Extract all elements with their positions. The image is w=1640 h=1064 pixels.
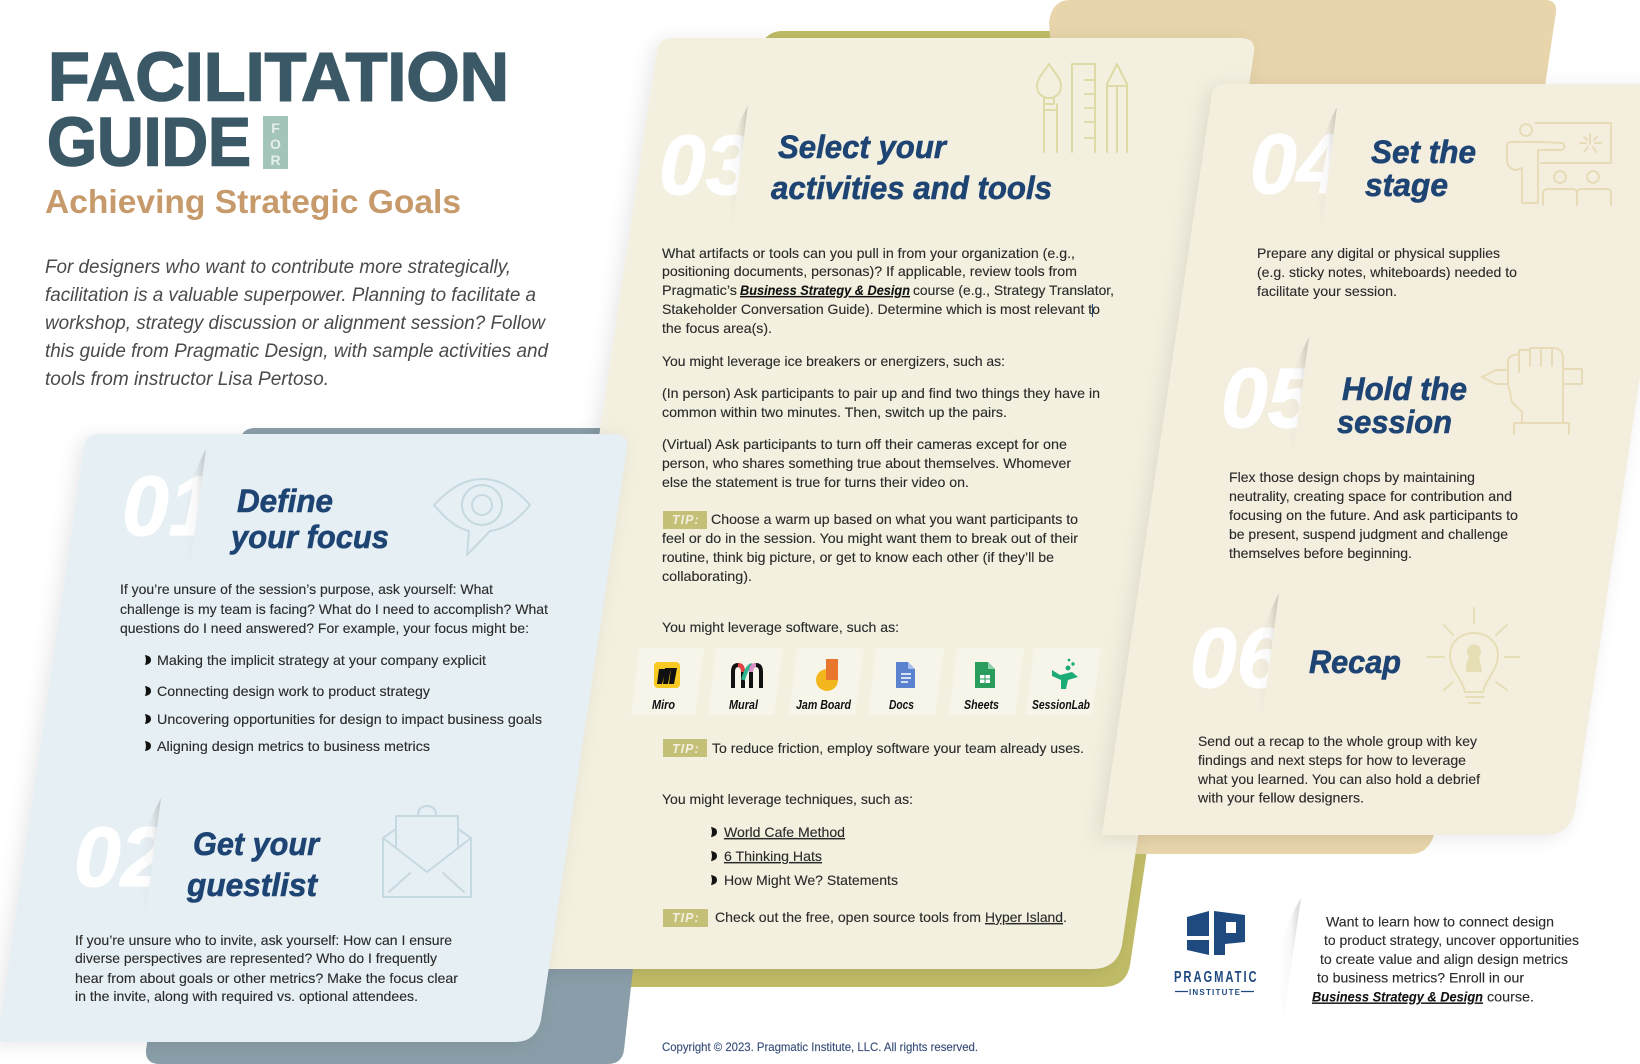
body text 03: common within two minutes. Then, switch up the pairs. [662, 404, 1007, 420]
tool: Docs [868, 648, 944, 715]
tip 1: Choose a warm up based on what you want participants to [711, 511, 1078, 527]
techniques list: World Cafe Method [724, 824, 845, 840]
body text 01: If you’re unsure of the session’s purpose, ask yourself: What [120, 581, 493, 597]
heading 03 [771, 129, 1052, 206]
tool: Sheets: Sheets [964, 697, 999, 712]
logo: Pragmatic Institute: INSTITUTE [1189, 988, 1241, 997]
panel: steps 01 and 02 blue [0, 434, 627, 1042]
intro text: tools from instructor Lisa Pertoso. [45, 369, 329, 390]
body text 05: themselves before beginning. [1229, 545, 1412, 561]
body text 04: Prepare any digital or physical supplies [1257, 245, 1500, 261]
divider fold [1278, 898, 1301, 1015]
call to action: to product strategy, uncover opportunities [1324, 932, 1579, 948]
logo: Pragmatic Institute [1174, 911, 1257, 997]
body text 03: the focus area(s). [662, 320, 772, 336]
body text 02: If you’re unsure who to invite, ask yourself: How can I ensure [75, 932, 452, 948]
body text 02: diverse perspectives are represented? Who do I frequently [75, 950, 437, 966]
tool: Mural [708, 648, 783, 715]
body text 03: What artifacts or tools can you pull in from your organization (e.g., [662, 245, 1075, 261]
tip 3: . [1063, 909, 1067, 925]
tool: Sheets [949, 648, 1024, 715]
techniques list: You might leverage techniques, such as: [662, 791, 913, 807]
icon: eye speech bubble [434, 479, 530, 555]
techniques list: How Might We? Statements [724, 872, 898, 888]
number 02: 02 [74, 810, 167, 904]
body text 05: be present, suspend judgment and challenge [1229, 526, 1508, 542]
body text 03 [662, 245, 1114, 490]
body text 02: hear from about goals or other metrics? Make the focus clear [75, 970, 458, 986]
techniques list [662, 791, 913, 888]
call to action: Want to learn how to connect design [1326, 914, 1554, 930]
icon: envelope [383, 806, 471, 897]
heading 03: Select your [778, 129, 948, 165]
call to action: to create value and align design metrics [1320, 951, 1568, 967]
body text 05: neutrality, creating space for contribution and [1229, 488, 1512, 504]
body text 03: Pragmatic’s [662, 282, 737, 298]
body text 01: challenge is my team is facing? What do I need to accomplish? What [120, 601, 548, 617]
body text 04 [1257, 245, 1517, 299]
icon: light bulb [1427, 608, 1519, 703]
number 01 [125, 450, 206, 536]
icon: hand holding pen [1482, 348, 1582, 434]
body text 03: (In person) Ask participants to pair up and find two things they have in [662, 385, 1100, 401]
body text 05 [1229, 469, 1518, 561]
body text 06: Send out a recap to the whole group with key [1198, 733, 1477, 749]
body text 02 [75, 932, 458, 1004]
backing shape: olive [620, 31, 1200, 987]
body text 06: with your fellow designers. [1197, 790, 1364, 806]
tip 1 [662, 511, 1078, 584]
tool: SessionLab: SessionLab [1032, 697, 1090, 712]
bullet list 01 [145, 652, 542, 754]
number 02 [77, 798, 161, 888]
software intro: You might leverage software, such as: [662, 619, 899, 635]
tool: Jam Board [789, 648, 864, 715]
body text 03: positioning documents, personas)? If applicable, review tools from [662, 263, 1077, 279]
tip 3: Hyper Island [985, 909, 1063, 925]
backing shape: tan [1049, 0, 1556, 854]
tag: FOR: F [271, 120, 280, 136]
call to action [1312, 914, 1579, 1004]
number 05 [1224, 338, 1309, 429]
tip 2: TIP: [672, 742, 700, 756]
heading 04: stage [1365, 167, 1448, 203]
body text 01: questions do I need answered? For example, your focus might be: [120, 620, 529, 636]
tag: FOR: O [270, 136, 281, 152]
tool: Miro [631, 648, 704, 715]
tip 3 [663, 909, 1067, 927]
header block [45, 38, 549, 390]
intro text: this guide from Pragmatic Design, with sample activities and [45, 341, 549, 362]
heading 04: Set the [1371, 134, 1476, 170]
intro text: For designers who want to contribute more strategically, [45, 257, 511, 278]
body text 05: focusing on the future. And ask participants to [1229, 507, 1518, 523]
tip 1: routine, think big picture, or get to know each other (if they’ll be [662, 549, 1054, 565]
body text 06: what you learned. You can also hold a debrief [1197, 771, 1480, 787]
bullet list 01: Making the implicit strategy at your company explicit [157, 652, 486, 668]
heading 05: Hold the [1342, 371, 1467, 407]
body text 03: course (e.g., Strategy Translator, [913, 282, 1114, 298]
number 01: 01 [122, 459, 215, 553]
tag: FOR: R [270, 152, 281, 168]
number 03: 03 [659, 118, 752, 212]
tool: Docs: Docs [889, 697, 914, 712]
software tools row [631, 648, 1101, 715]
heading 01: your focus [229, 519, 389, 555]
heading 02: Get your [193, 826, 320, 862]
body text 05: Flex those design chops by maintaining [1229, 469, 1475, 485]
number 04 [1252, 108, 1337, 195]
tool: Miro: Miro [652, 697, 675, 712]
tip 2: To reduce friction, employ software your team already uses. [712, 740, 1084, 756]
copyright: Copyright © 2023. Pragmatic Institute, LLC. All rights reserved. [662, 1040, 978, 1054]
title: GUIDE [47, 104, 251, 180]
call to action: to business metrics? Enroll in our [1317, 970, 1524, 986]
intro text: facilitation is a valuable superpower. Planning to facilitate a [45, 285, 536, 306]
title: FACILITATION [48, 38, 509, 116]
tool: Mural: Mural [729, 697, 758, 712]
heading 02: guestlist [186, 867, 318, 903]
intro text [45, 257, 549, 390]
body text 03: You might leverage ice breakers or energizers, such as: [662, 353, 1005, 369]
panel: steps 04 to 06 cream [1102, 84, 1640, 835]
bullet list 01: Connecting design work to product strategy [157, 683, 430, 699]
heading 05 [1337, 371, 1467, 440]
logo: Pragmatic Institute: PRAGMATIC [1174, 967, 1257, 985]
body text 06: findings and next steps for how to leverage [1198, 752, 1466, 768]
number 03 [662, 106, 748, 196]
tip 3: TIP: [672, 911, 700, 925]
tip 3: Check out the free, open source tools from [715, 909, 981, 925]
heading 01: Define [237, 483, 333, 519]
body text 03: else the statement is true for turns their video on. [662, 474, 969, 490]
call to action: Business Strategy & Design [1312, 988, 1483, 1004]
number 06 [1192, 594, 1279, 689]
heading 01 [229, 483, 389, 555]
heading 06: Recap [1309, 644, 1401, 680]
tip 1: TIP: [672, 513, 700, 527]
heading 04 [1365, 134, 1476, 203]
heading 05: session [1337, 404, 1452, 440]
heading 03: activities and tools [771, 170, 1052, 206]
bullet list 01: Uncovering opportunities for design to impact business goals [157, 711, 542, 727]
title [47, 38, 509, 180]
body text 03: (Virtual) Ask participants to turn off their cameras except for one [662, 436, 1067, 452]
body text 03: person, who shares something true about themselves. Whomever [662, 455, 1071, 471]
bullet list 01: Aligning design metrics to business metrics [157, 738, 430, 754]
heading 02 [186, 826, 320, 903]
body text 01 [120, 581, 548, 636]
subtitle: Achieving Strategic Goals [45, 183, 461, 220]
panel: steps 03 yellow [530, 38, 1254, 969]
body text 02: in the invite, along with required vs. optional attendees. [75, 988, 418, 1004]
body text 03: Stakeholder Conversation Guide). Determine which is most relevant to [662, 301, 1100, 317]
icon: brush, ruler and pencil [1037, 64, 1127, 152]
tag: FOR [263, 116, 288, 169]
number 06: 06 [1190, 611, 1285, 705]
tool: Jam Board: Jam Board [796, 697, 852, 712]
body text 04: facilitate your session. [1257, 283, 1397, 299]
body text 04: (e.g. sticky notes, whiteboards) needed to [1257, 264, 1517, 280]
number 05: 05 [1221, 351, 1316, 445]
intro text: workshop, strategy discussion or alignment session? Follow [45, 313, 546, 334]
techniques list: 6 Thinking Hats [724, 848, 822, 864]
body text 06 [1197, 733, 1480, 806]
icon: presenter at board [1507, 123, 1611, 205]
tip 1: collaborating). [662, 568, 752, 584]
backing shape: slate [146, 428, 690, 1064]
tool: SessionLab [1026, 648, 1101, 715]
number 04: 04 [1250, 117, 1343, 211]
call to action: course. [1487, 988, 1534, 1004]
tip 1: feel or do in the session. You might want them to break out of their [662, 530, 1078, 546]
body text 03: Business Strategy & Design [740, 282, 910, 298]
